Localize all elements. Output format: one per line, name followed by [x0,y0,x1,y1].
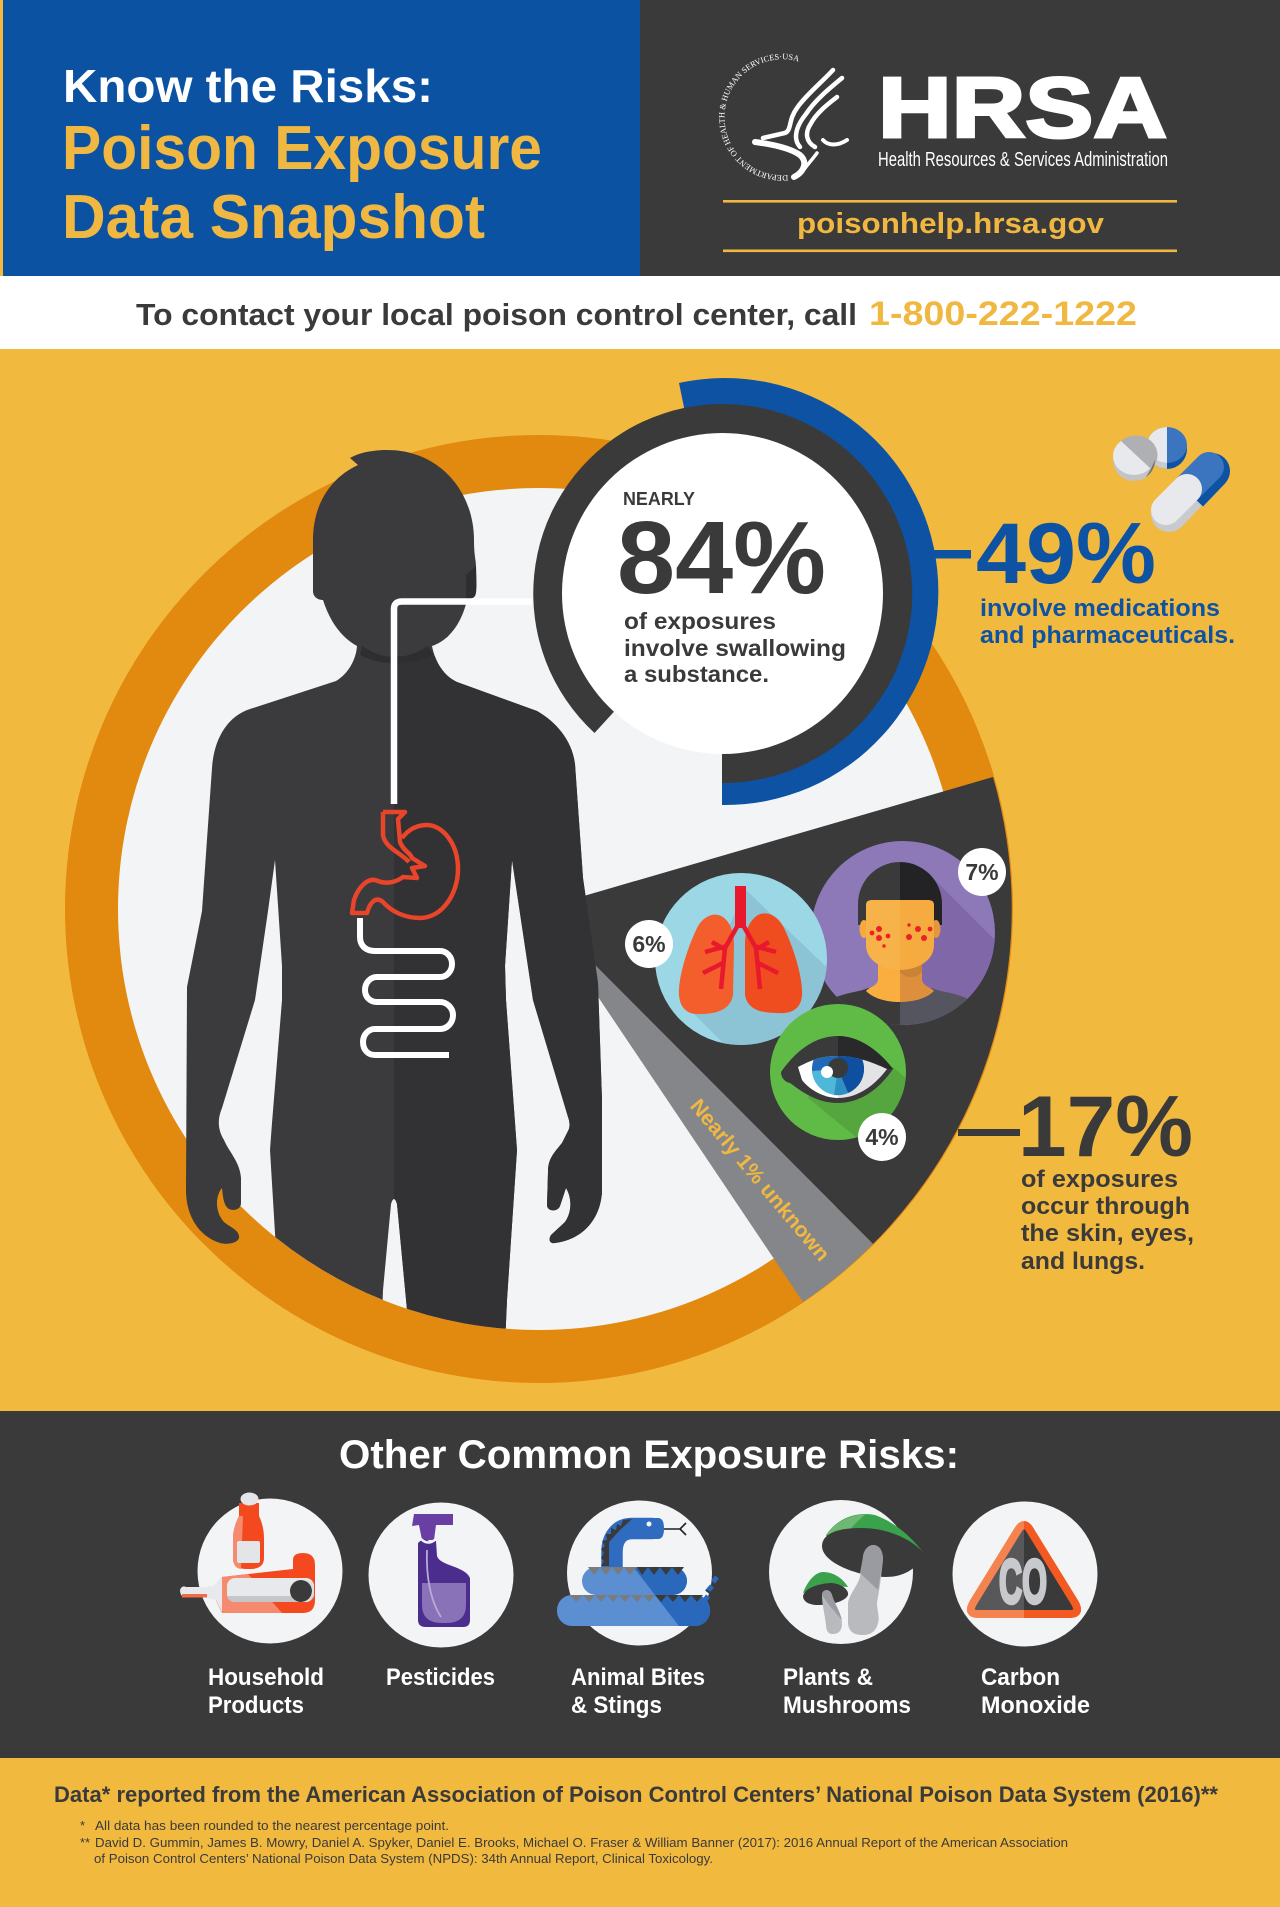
badge: 6 percent [625,920,673,968]
icon: household products [180,1492,342,1644]
spray bottle [412,1514,453,1540]
title line: Poison Exposure: Poison Exposure [62,114,542,183]
small mushroom stem [822,1590,842,1634]
CO symbol: CO [999,1548,1047,1617]
slice: skin, eyes and lungs [539,777,1012,1244]
label: carbon monoxide: Monoxide [981,1692,1090,1719]
rattle [697,1577,717,1610]
label: animal bites and stings [571,1664,705,1719]
small mushroom cap [803,1572,848,1593]
icon: face with rash, 7 percent [811,841,1000,1030]
icon: HHS seal: DEPARTMENT OF HEALTH & HUMAN SERVICES·USA [718,54,799,181]
airways [703,886,778,989]
badge: 4 percent [858,1113,906,1161]
description: skin eyes lungs: and lungs. [1021,1248,1145,1275]
neck [866,960,900,1002]
description: skin eyes lungs [1021,1166,1194,1275]
description: skin eyes lungs: occur through [1021,1193,1190,1220]
hair [858,862,900,925]
description: medications [980,595,1235,649]
label: carbon monoxide [981,1664,1090,1719]
shirt [836,988,900,1025]
badge: 7 percent: 7% [965,859,999,885]
rash spots [870,923,932,948]
round blue pill [1147,429,1187,469]
footnotes: * [80,1818,85,1833]
title line: Data Snapshot: Data Snapshot [62,183,485,252]
orange ring [65,435,1013,1383]
footnotes: All data has been rounded to the nearest percentage point. [95,1818,449,1833]
label: plants and mushrooms: Plants & [783,1664,873,1691]
snake coils [582,1567,687,1595]
tube nozzle [180,1586,211,1597]
label: animal bites and stings: & Stings [571,1692,662,1719]
label: carbon monoxide: Carbon [981,1664,1060,1691]
description: swallowing: involve swallowing [624,635,846,661]
stat: 17 percent: 17% [1018,1079,1193,1175]
white swallow line [394,602,532,804]
label: nearly: NEARLY [623,489,695,509]
footer: data source [54,1782,1218,1866]
description: swallowing [624,608,846,687]
title line: Know the Risks: Know the Risks: [63,60,433,112]
badge: 4 percent: 4% [865,1124,899,1150]
description: swallowing: of exposures [624,608,776,634]
wordmark subtitle: Health Resources & Services Administration [878,148,1168,171]
panel: other common exposure risks [0,1411,1280,1758]
icon: stomach [352,812,458,918]
icon: intestines [360,918,453,1055]
description: swallowing: a substance. [624,661,769,687]
capsule [1169,492,1190,514]
slice: unknown [539,909,873,1302]
stat: 84 percent: 84% [617,500,826,615]
source line: Data* reported from the American Association of Poison Control Centers’ National Poison Data System (2016)** [54,1782,1218,1807]
left lung [679,915,734,1014]
warning triangle [966,1521,1024,1618]
contact text: To contact your local poison control center, call [136,297,857,332]
eye outline [781,1036,893,1103]
footnotes [80,1818,1068,1866]
icon: eye, 4 percent [770,1004,906,1140]
right lung [745,913,802,1013]
label: plants and mushrooms [783,1664,911,1719]
description: medications: involve medications [980,595,1220,622]
header panel: HRSA logo and website [640,0,1280,276]
icon: animal bites and stings [557,1500,717,1646]
figure: human body with digestive tract [186,450,614,1356]
heading: Other Common Exposure Risks: [339,1433,959,1477]
icon: plants and mushrooms [769,1500,924,1644]
footnotes: David D. Gummin, James B. Mowry, Daniel A. Spyker, Daniel E. Brooks, Michael O. Fraser & William Banner (2017): 2016 Annual Report of the American Association [95,1835,1068,1850]
icon: pesticides [368,1502,514,1648]
description: skin eyes lungs: the skin, eyes, [1021,1220,1194,1247]
description: skin eyes lungs: of exposures [1021,1166,1178,1193]
header panel: title [3,0,640,276]
snake head and neck [612,1528,652,1575]
arc: 49 percent medications [679,378,938,805]
label: pesticides: Pesticides [386,1664,495,1691]
badge: 6 percent: 6% [632,931,666,957]
website: poisonhelp.hrsa.gov [797,208,1104,240]
label: household products: Products [208,1692,304,1719]
callout: 17 percent skin eyes lungs [958,1079,1194,1275]
arc: 84 percent swallowing [533,404,912,783]
icon: pills [1113,427,1230,514]
round grey pill [1113,439,1155,481]
label: household products: Household [208,1664,324,1691]
pie chart: exposure routes [65,435,1013,1383]
icon: carbon monoxide [952,1502,1098,1646]
coil scale teeth [570,1567,655,1602]
large mushroom stem [848,1545,883,1635]
face [866,900,900,970]
icon: HHS seal [718,54,850,181]
large mushroom cap [826,1514,924,1553]
stat: 49 percent: 49% [976,506,1156,602]
tongue [662,1523,686,1535]
label: animal bites and stings: Animal Bites [571,1664,705,1691]
phone number: 1-800-222-1222 [869,295,1137,333]
description: medications: and pharmaceuticals. [980,622,1235,649]
badge: 7 percent [958,848,1006,896]
label: nearly 1 percent unknown: Nearly 1% unknown [685,1095,834,1266]
footnotes: ** [80,1835,90,1850]
bottle [233,1503,264,1569]
label: household products [208,1664,324,1719]
ears [860,920,866,938]
callout: 49 percent medications [933,506,1235,649]
footnotes: of Poison Control Centers’ National Poison Data System (NPDS): 34th Annual Report, Clinical Toxicology. [94,1851,713,1866]
icon: lungs, 6 percent [655,873,827,1045]
tube [211,1553,315,1613]
eye white and iris [798,1056,887,1098]
callout: 84 percent swallowing [533,378,938,805]
contact band [0,276,1280,349]
wordmark: HRSA: HRSA [878,61,1167,156]
label: plants and mushrooms: Mushrooms [783,1692,911,1719]
